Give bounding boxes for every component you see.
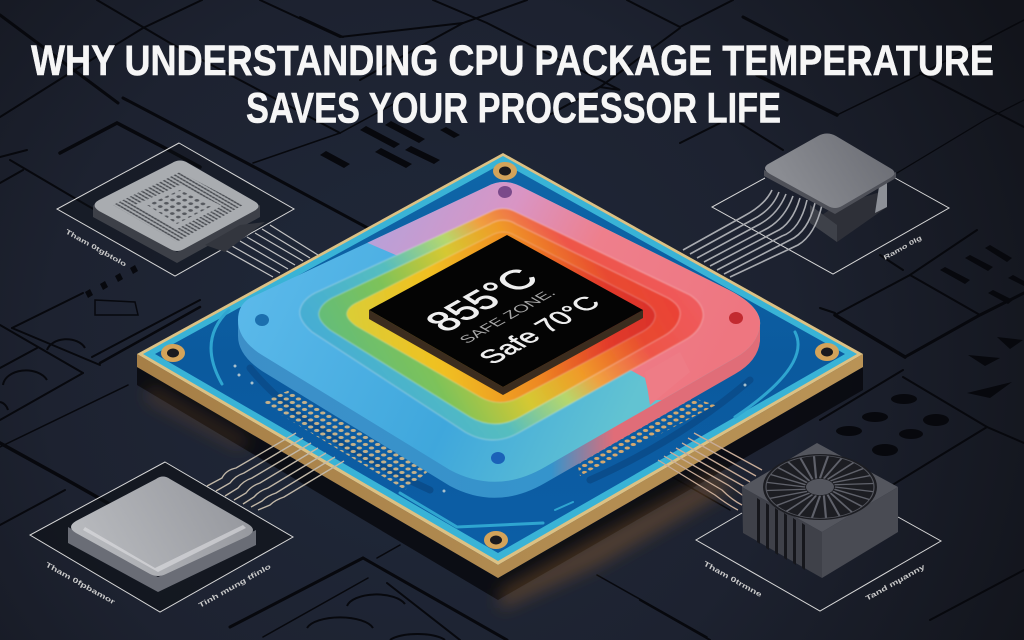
outline [712,178,949,274]
fan [763,454,877,520]
pink step [645,352,690,405]
temperature display chip [369,235,643,395]
frame top surface [238,182,760,482]
frame holes [255,186,743,464]
wires [658,433,762,510]
wires [683,190,822,277]
contact pads right [576,398,716,476]
board reflection [145,385,730,610]
CPU board [137,153,863,578]
heat spreader thermal frame [238,182,760,498]
ring: middle thermal band [319,220,680,424]
cube right face [822,487,898,578]
chip side [369,310,643,395]
board surface [137,153,863,565]
board gold side [137,354,863,578]
cooling fins [757,498,805,570]
lid side [68,527,256,592]
ring: outer thermal band [300,208,703,440]
contact pads left [260,390,430,490]
component: socket top left [57,143,318,277]
label: Tham 0tgbtolo [64,227,128,268]
reading: SAFE ZONE.: SAFE ZONE. [456,287,560,346]
chip top [369,235,643,387]
pin grid [113,172,243,242]
cap [764,170,896,214]
outline [30,462,293,612]
board traces [211,310,798,527]
title [31,37,994,132]
wires [207,433,344,510]
cube top face [742,443,898,532]
reading: Safe 70°C: Safe 70°C [472,292,607,368]
connector block [205,222,265,252]
label left: Tham 0trmne [702,559,763,599]
component: metal lid bottom left [30,433,344,612]
frame side [238,320,760,498]
title line 2: SAVES YOUR PROCESSOR LIFE [246,84,781,132]
component: heat sink top right [683,134,949,277]
label: Ramo 0lg [883,234,923,261]
cube left face [742,487,822,578]
board small marks [234,364,746,492]
outline [696,513,941,611]
outline [57,143,294,276]
lid top [71,476,253,576]
component: fan cooler bottom right [658,433,941,611]
label left: Tham 0fpbamor [44,560,117,606]
mounting holes [161,162,839,549]
ring: inner hot zone [347,232,655,402]
label right: Tinh mung tfinlo [197,562,273,609]
base block [810,190,887,242]
wires to board [225,225,318,277]
slots and pills [85,121,1024,456]
reading: 855°C: 855°C [416,263,549,337]
chip body [93,205,260,263]
board shadow [137,367,863,600]
label right: Tand mµanny [864,562,926,602]
arcs and outlines etched in the tiles [0,300,445,640]
